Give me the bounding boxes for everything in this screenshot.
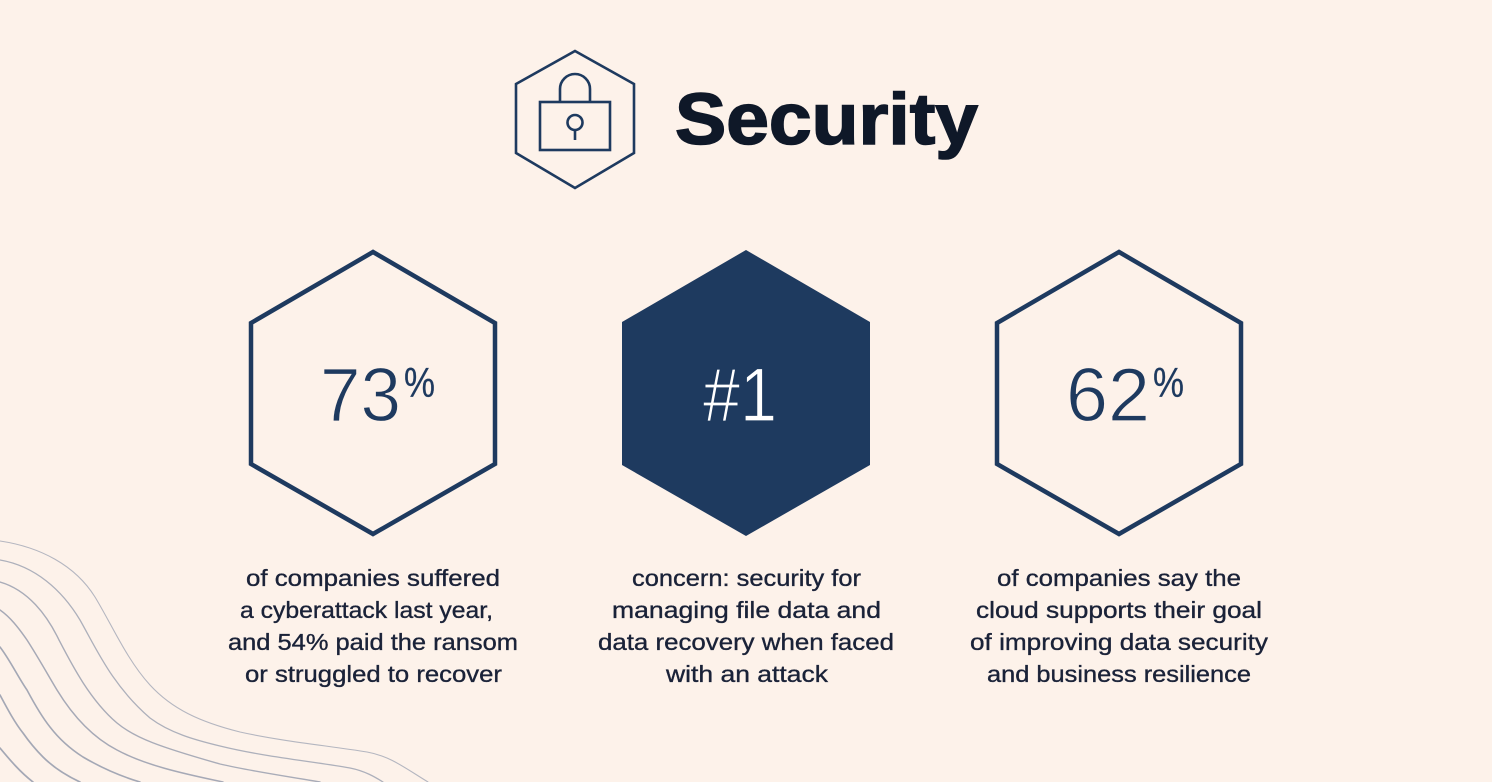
icon: padlock in hexagon [516, 51, 634, 188]
hexagon outline with 73%: % [404, 359, 435, 406]
description: 73% [228, 565, 518, 687]
hexagon outline with 62%: % [1153, 359, 1184, 406]
description: #1: concern: security for [632, 565, 861, 591]
filled hexagon with #1: #1 [703, 353, 777, 438]
description: 73%: and 54% paid the ransom [228, 629, 518, 655]
description: #1: data recovery when faced [598, 629, 894, 655]
description: #1 [598, 565, 894, 687]
filled hexagon with #1 [622, 250, 870, 536]
hexagon outline with 73% [251, 252, 495, 534]
description: 73%: a cyberattack last year, [240, 597, 493, 623]
description: 62%: cloud supports their goal [976, 597, 1262, 623]
title: Security [675, 80, 978, 160]
panel: #1 stat [598, 250, 894, 687]
header: icon and title [516, 51, 978, 188]
description: 62%: and business resilience [987, 661, 1251, 687]
description: 62%: of companies say the [997, 565, 1241, 591]
hexagon outline with 62% [997, 252, 1241, 534]
decorative wave lines [0, 541, 428, 782]
panel: 73% stat [228, 252, 518, 687]
description: #1: with an attack [665, 661, 829, 687]
panel: 62% stat [970, 252, 1269, 687]
hexagon outline with 62%: 62 [1066, 353, 1150, 438]
description: 62%: of improving data security [970, 629, 1269, 655]
hexagon outline with 73%: 73 [320, 353, 401, 438]
description: 62% [970, 565, 1269, 687]
description: 73%: of companies suffered [246, 565, 500, 591]
description: #1: managing file data and [612, 597, 881, 623]
description: 73%: or struggled to recover [245, 661, 502, 687]
